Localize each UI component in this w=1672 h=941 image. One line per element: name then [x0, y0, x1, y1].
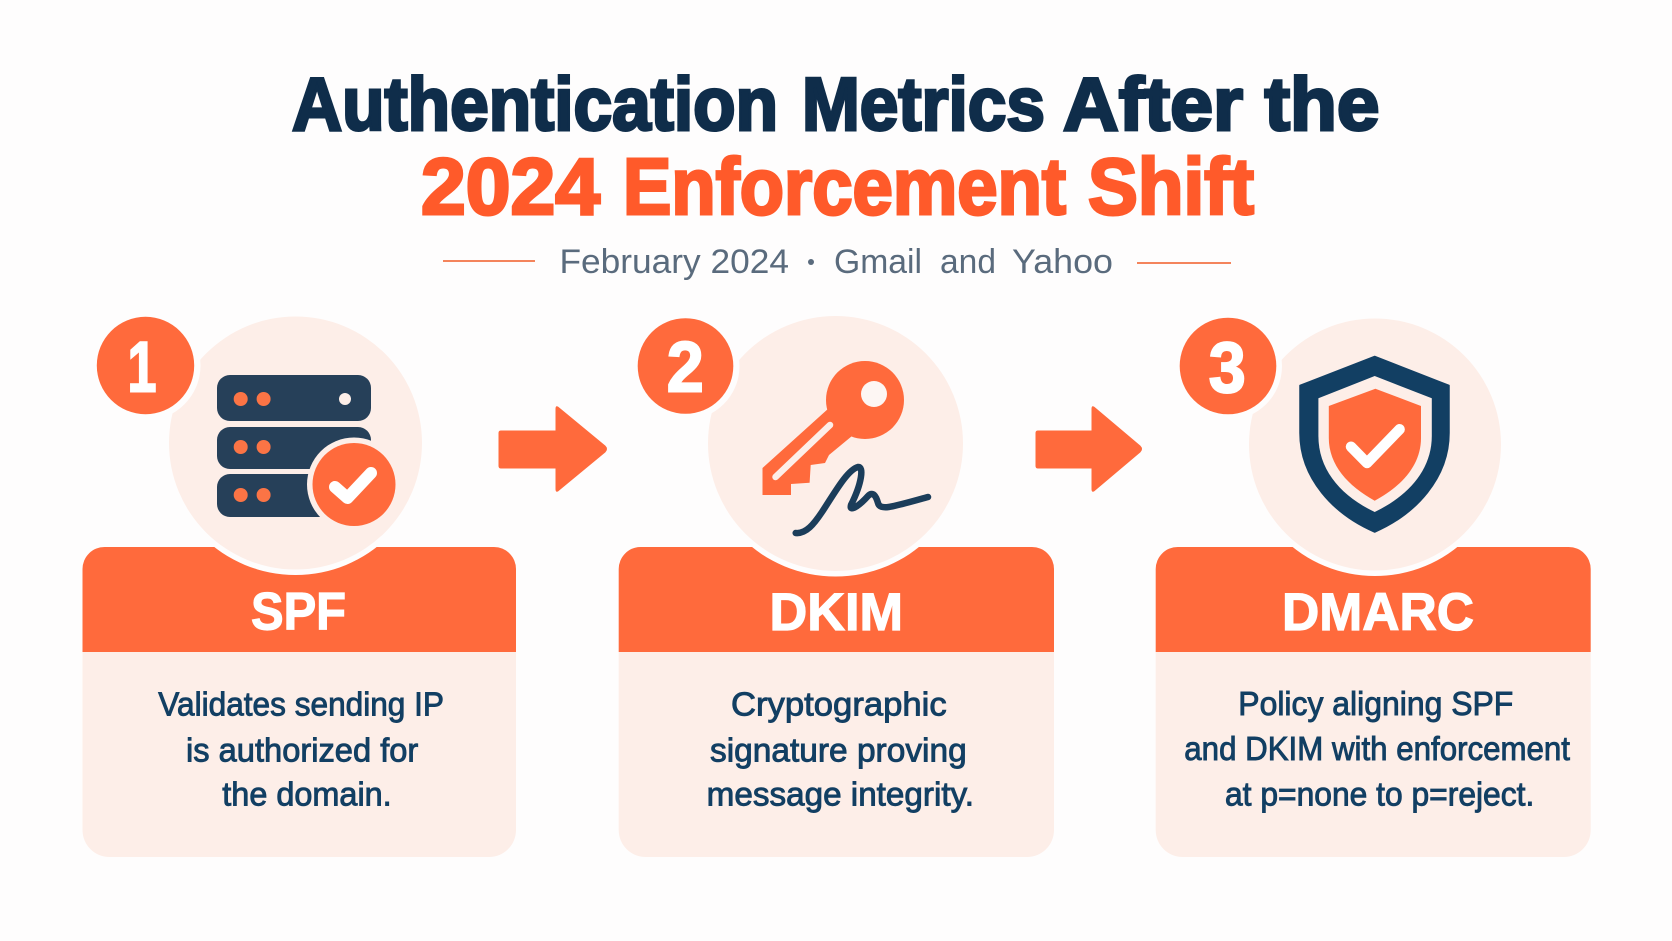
- subtitle text: Gmail: [834, 243, 922, 281]
- DMARC description: [1184, 685, 1570, 813]
- panel: DKIM: [619, 310, 1054, 857]
- SPF description: the domain.: [222, 776, 392, 813]
- subtitle text: Yahoo: [1012, 243, 1113, 281]
- DMARC description: and DKIM with enforcement: [1184, 730, 1570, 767]
- DKIM description: Cryptographic: [731, 686, 947, 723]
- DKIM description: message integrity.: [707, 776, 974, 813]
- arrow: SPF to DKIM: [499, 407, 606, 491]
- subtitle text: and: [940, 243, 996, 281]
- title line 1: Authentication: [292, 62, 778, 146]
- subtitle: [443, 243, 1231, 281]
- DMARC card body: [1156, 652, 1591, 857]
- DKIM card body: [619, 652, 1054, 857]
- title line 2: [421, 142, 1254, 231]
- title line 1: Metrics: [802, 62, 1045, 146]
- SPF label: SPF: [251, 582, 346, 642]
- subtitle text: February 2024: [560, 243, 789, 281]
- step badge 1: 1: [128, 328, 156, 408]
- icon circle: [1249, 318, 1501, 570]
- DKIM card header: [619, 547, 1054, 652]
- DMARC label: DMARC: [1282, 583, 1474, 642]
- icon: server with check: [217, 375, 401, 532]
- step badge 2: 2: [667, 328, 704, 408]
- SPF description: Validates sending IP: [158, 686, 444, 723]
- title: [292, 62, 1380, 231]
- DMARC description: at p=none to p=reject.: [1225, 776, 1534, 813]
- subtitle text: [560, 243, 1113, 281]
- title line 1: After: [1063, 62, 1243, 146]
- panel: DMARC: [1156, 312, 1591, 857]
- title line 2: Enforcement: [623, 142, 1066, 231]
- step badge 3: [1180, 318, 1276, 414]
- icon: shield with check: [1300, 356, 1449, 532]
- DKIM description: signature proving: [710, 732, 967, 769]
- icon circle: [169, 316, 422, 570]
- DKIM label: DKIM: [770, 583, 903, 642]
- title line 1: the: [1264, 62, 1380, 146]
- icon circle: [708, 316, 963, 571]
- DKIM description: [707, 686, 974, 813]
- title line 2: Shift: [1088, 142, 1254, 231]
- SPF card body: [82, 652, 516, 857]
- title line 2: 2024: [421, 142, 601, 231]
- SPF card header: [82, 547, 516, 652]
- step badge 1: [97, 317, 194, 414]
- SPF description: [158, 686, 444, 813]
- panel: SPF: [82, 310, 516, 857]
- DMARC card header: [1156, 547, 1591, 652]
- title line 1: [292, 62, 1380, 146]
- icon: key and signature: [762, 361, 928, 533]
- arrow: DKIM to DMARC: [1036, 407, 1142, 491]
- step badge 3: 3: [1209, 329, 1246, 408]
- DMARC description: Policy aligning SPF: [1238, 685, 1513, 722]
- SPF description: is authorized for: [186, 732, 418, 769]
- step badge 2: [638, 318, 733, 414]
